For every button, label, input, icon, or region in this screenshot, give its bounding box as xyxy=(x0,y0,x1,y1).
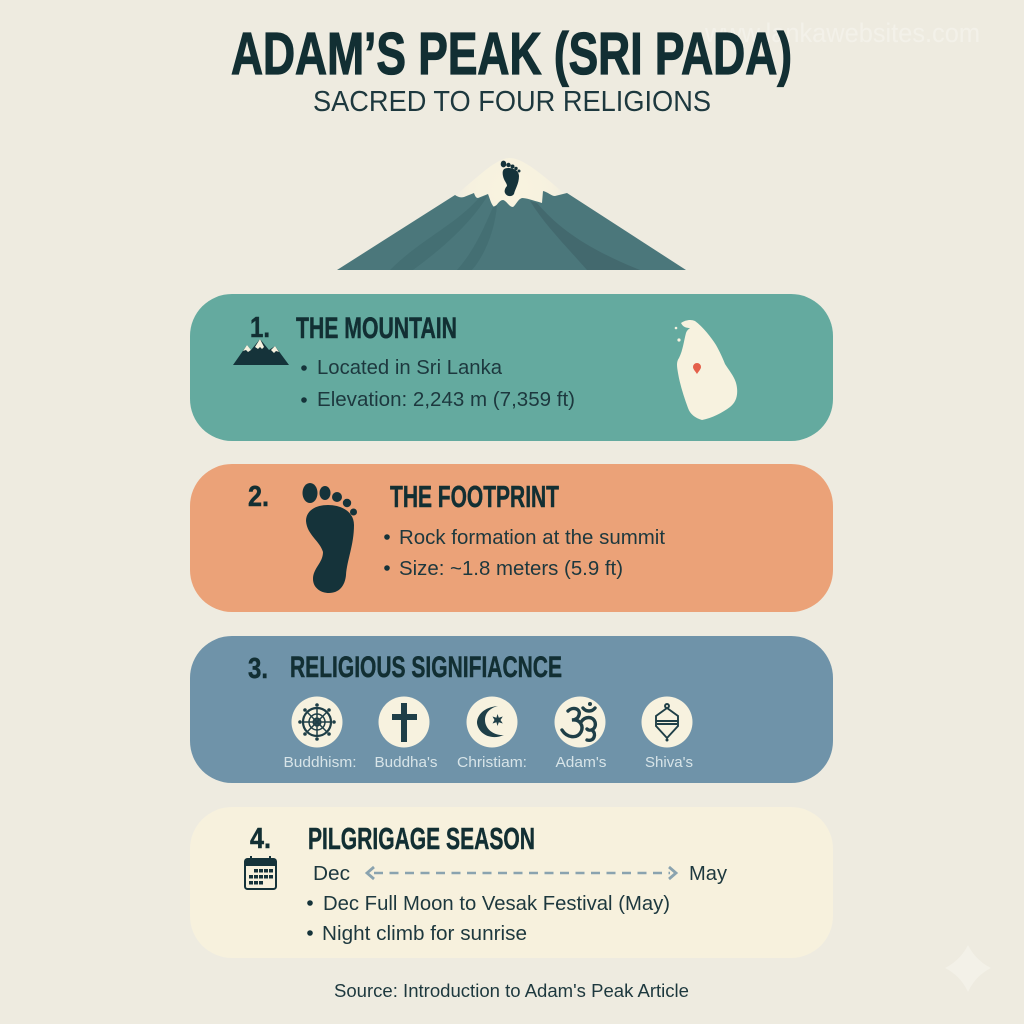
religion labels: Adam's xyxy=(556,755,606,771)
label: Dec: Dec xyxy=(313,862,350,885)
religion labels xyxy=(284,755,693,771)
bullet list xyxy=(301,356,575,411)
panel: the mountain xyxy=(190,294,833,441)
number 1: 1. xyxy=(250,312,270,344)
icon: footprint xyxy=(302,483,357,593)
religion labels: Buddhism: xyxy=(284,755,356,771)
icon: snowy peaks xyxy=(233,339,289,365)
panel: the footprint xyxy=(190,464,833,612)
icon: Sri Lanka map with pin xyxy=(675,320,737,420)
number 3: 3. xyxy=(248,653,268,685)
heading: the mountain: THE MOUNTAIN xyxy=(296,312,457,345)
bullet list: Rock formation at the summit xyxy=(399,526,665,549)
source line: Source: Introduction to Adam's Peak Article xyxy=(334,981,689,1001)
title: ADAM’S PEAK (SRI PADA) xyxy=(231,21,792,87)
bullet list: Located in Sri Lanka xyxy=(317,356,503,379)
icon: om symbol xyxy=(554,696,606,748)
subtitle: SACRED TO FOUR RELIGIONS xyxy=(313,86,711,118)
bullet list: Night climb for sunrise xyxy=(322,922,527,945)
number 4: 4. xyxy=(250,823,271,855)
watermark: www.lankawebsites.com xyxy=(704,18,980,48)
heading: pilgrimage season: PILGRIGAGE SEASON xyxy=(308,821,535,856)
heading: the footprint: THE FOOTPRINT xyxy=(390,479,559,514)
religion labels: Shiva's xyxy=(645,755,693,771)
icon: crescent and star xyxy=(466,696,518,748)
heading: religious significance: RELIGIOUS SIGNIFIACNCE xyxy=(290,651,562,684)
number 2: 2. xyxy=(248,481,269,513)
illustration: mountain with footprint xyxy=(337,158,686,270)
icon: shatkona xyxy=(642,696,692,748)
icon: cross xyxy=(378,696,430,748)
bullet list: Dec Full Moon to Vesak Festival (May) xyxy=(323,892,670,915)
panel: religious significance xyxy=(190,636,833,783)
panel: pilgrimage season xyxy=(190,807,833,958)
bullet list: Elevation: 2,243 m (7,359 ft) xyxy=(317,388,575,411)
arrow: December to May xyxy=(367,867,676,879)
religion labels: Buddha's xyxy=(374,755,438,771)
bullet list xyxy=(307,892,670,945)
religion labels: Christiam: xyxy=(457,755,527,771)
icon: calendar xyxy=(245,856,276,889)
icon: dharma wheel xyxy=(292,696,342,748)
label: May: May xyxy=(689,862,728,885)
bullet list: Size: ~1.8 meters (5.9 ft) xyxy=(399,557,623,580)
icon: sparkle watermark xyxy=(945,945,991,992)
bullet list xyxy=(384,526,665,580)
